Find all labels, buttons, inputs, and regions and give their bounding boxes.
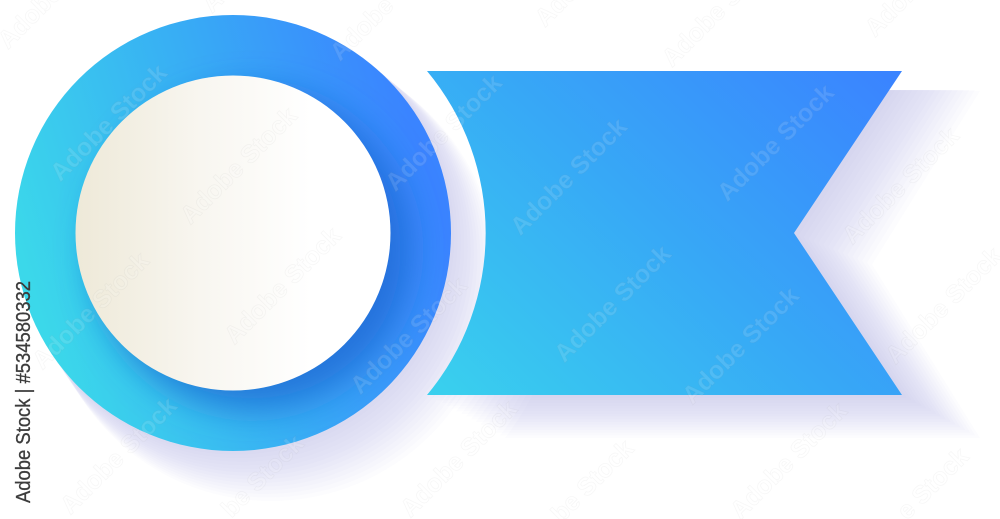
- watermarks: Adobe Stock: [549, 240, 677, 368]
- ribbon long shadow: [446, 90, 970, 432]
- watermarks: Adobe Stock: [712, 79, 840, 207]
- watermarks: Adobe Stock: [380, 69, 508, 197]
- watermarks: Adobe Stock: [175, 102, 303, 230]
- watermarks: Adobe Stock: [45, 59, 173, 187]
- ribbon banner: [427, 71, 902, 395]
- watermarks: Adobe Stock: [345, 272, 473, 400]
- watermarks: Adobe Stock: [55, 392, 183, 519]
- watermarks: Adobe Stock: [677, 282, 805, 410]
- watermarks: Adobe Stock: [219, 222, 347, 350]
- watermarks: Adobe Stock: [505, 113, 633, 241]
- stock id caption: Adobe Stock | #534580332: [13, 281, 35, 503]
- circle long shadow: [17, 17, 497, 501]
- watermarks: Adobe Stock: [27, 247, 155, 375]
- blue ring circle: [15, 15, 451, 451]
- watermarks: Adobe Stock: [395, 395, 523, 519]
- watermarks: Adobe Stock: [837, 122, 965, 250]
- cream inner disc: [76, 76, 390, 390]
